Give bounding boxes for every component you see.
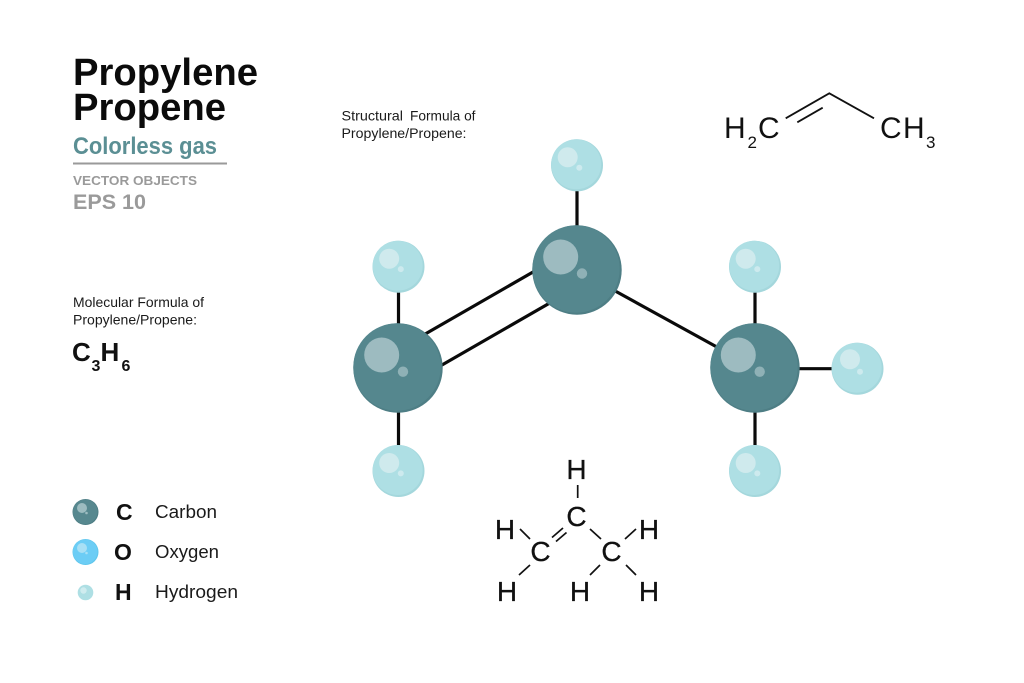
molecular formula block [72,295,204,375]
condensed structural formula H2C=CH-CH3: H [903,112,925,145]
label: vector objects: VECTOR OBJECTS [73,173,197,188]
title block [73,52,258,214]
legend [72,499,238,605]
molecular formula caption [73,295,204,328]
hydrogen atom: top [551,139,603,191]
hydrogen atom: lower left [372,445,424,497]
bonds [398,165,858,471]
molecular formula C3H6: H [100,337,119,367]
molecular formula C3H6: 6 [122,358,130,375]
hydrogen atom: lower right [729,445,781,497]
atom letters: C [601,536,622,567]
condensed structural formula H2C=CH-CH3: C [758,112,780,145]
condensed structural formula H2C=CH-CH3: 3 [926,133,935,152]
hydrogen atom: far right [832,343,884,395]
condensed structural formula H2C=CH-CH3 [724,93,935,152]
hydrogen atom: upper right [729,241,781,293]
atom letters: C [530,536,551,567]
carbon atom: centre [532,225,622,315]
structural formula caption: Propylene/Propene: [342,126,466,141]
atom letters: C [566,501,587,532]
carbon atom: left [353,323,443,413]
legend item: hydrogen [78,579,238,605]
molecular formula caption: Molecular Formula of [73,295,204,310]
molecular formula C3H6: C [72,337,91,367]
legend item: oxygen [72,539,219,565]
3D ball-and-stick molecule model [353,139,884,497]
full structural formula diagram [495,454,659,607]
bond lines [519,485,636,575]
atom letters: H [639,576,659,607]
condensed structural formula H2C=CH-CH3: H [724,112,746,145]
atom letters: H [639,514,659,545]
atom letters: H [566,454,587,485]
structural formula caption: Formula of [410,108,476,124]
structural formula caption [342,108,476,141]
label: EPS 10: EPS 10 [73,191,146,214]
legend item: carbon [72,499,217,525]
subtitle: Colorless gas: Colorless gas [73,133,217,160]
carbon atom: right [710,323,800,413]
atom letters: H [497,576,517,607]
legend item: oxygen: O [114,539,132,565]
atom letters: H [495,514,515,545]
atom letters [495,454,659,607]
structural formula caption: Structural [342,108,403,124]
legend item: carbon: C [116,499,133,525]
molecular formula caption: Propylene/Propene: [73,312,197,328]
molecular formula C3H6: 3 [92,358,100,375]
legend item: carbon: Carbon [155,502,217,522]
title: Propene: Propene [73,87,226,129]
hydrogen atom: upper left [372,241,424,293]
condensed structural formula H2C=CH-CH3: C [880,112,902,145]
legend item: oxygen: Oxygen [155,542,219,562]
atom letters: H [570,576,590,607]
condensed structural formula H2C=CH-CH3: 2 [748,133,757,152]
title: Propylene: Propylene [73,52,258,94]
legend item: hydrogen: H [115,579,132,605]
legend item: hydrogen: Hydrogen [155,582,238,602]
